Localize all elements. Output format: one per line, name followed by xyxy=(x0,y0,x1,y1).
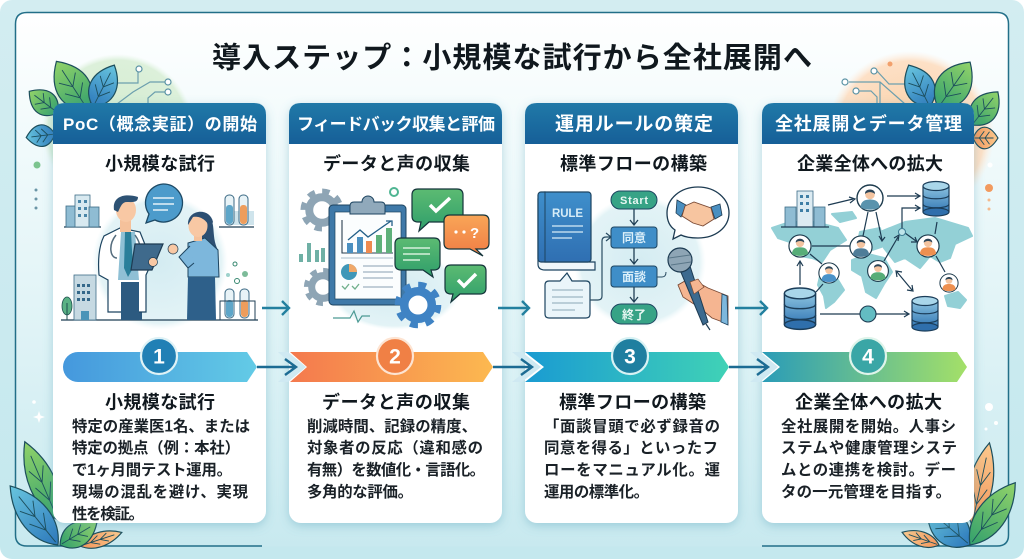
step 4 ribbon xyxy=(762,352,967,382)
illustration: rule book and flow: 同意 xyxy=(622,231,646,245)
panel: step 4 xyxy=(762,103,974,523)
step 1 subheading: 小規模な試行 xyxy=(105,154,215,174)
arrows: ribbon row xyxy=(257,352,778,382)
panel: step 1 xyxy=(53,103,266,523)
step 4 description: ステムや健康管理システ xyxy=(781,438,957,457)
illustration: rule book and flow xyxy=(538,187,729,330)
step 3 description: ローをマニュアル化。運 xyxy=(544,461,720,479)
step 1 ribbon xyxy=(63,352,257,382)
step 2 badge xyxy=(377,338,413,374)
step 3 description: 同意を得る」といったフ xyxy=(544,439,718,457)
step 2 badge: 2 xyxy=(389,346,401,368)
step 4 description: タの一元管理を目指す。 xyxy=(781,482,951,501)
step 1 description: 現場の混乱を避け、実現 xyxy=(72,483,249,501)
title: 導入ステップ：小規模な試行から全社展開へ xyxy=(212,42,812,74)
employee xyxy=(192,213,218,258)
step 2 description: 削減時間、記録の精度、 xyxy=(307,417,477,436)
step 2 description xyxy=(307,417,485,501)
step 1 badge xyxy=(141,338,177,374)
illustration: world network xyxy=(772,182,972,331)
step 4 header: 全社展開とデータ管理 xyxy=(775,113,962,134)
tubes bottom right xyxy=(233,262,237,266)
step 3 description xyxy=(544,417,720,501)
step 3 header xyxy=(525,103,738,144)
illustration: rule book and flow: RULE xyxy=(552,208,583,220)
step 1 description xyxy=(72,417,250,523)
doctor xyxy=(121,280,142,320)
step 4 subheading: 企業全体への拡大 xyxy=(797,154,943,174)
step 2 description: 有無）を数値化・言語化。 xyxy=(307,461,485,479)
step 1 description: 特定の拠点（例：本社） xyxy=(72,438,240,457)
step 4 header xyxy=(762,103,974,144)
step 1 header: PoC（概念実証）の開始 xyxy=(63,115,257,134)
step 3 badge xyxy=(612,338,648,374)
decoration: bottom leaves in front of cards and sparkles xyxy=(0,400,1024,554)
step 2 title: データと声の収集 xyxy=(322,392,470,412)
illustration: rule book and flow: 面談 xyxy=(622,269,646,284)
illustration: rule book and flow: Start xyxy=(620,195,648,207)
step 3 badge: 3 xyxy=(624,346,636,368)
step 4 description xyxy=(781,417,957,501)
step 1 description: 特定の産業医1名、または xyxy=(72,417,250,436)
step 4 badge: 4 xyxy=(862,346,874,368)
step 3 subheading: 標準フローの構築 xyxy=(560,153,707,174)
step 4 badge xyxy=(850,338,886,374)
step 3 description: 「面談冒頭で必ず録音の xyxy=(544,417,720,436)
step 4 description: ムとの連携を検討。デー xyxy=(781,460,956,479)
decoration: bottom leaves behind cards xyxy=(13,437,1001,558)
step 1 badge: 1 xyxy=(153,346,165,368)
panel: step 2 xyxy=(289,103,502,523)
step 2 description: 対象者の反応（違和感の xyxy=(307,438,483,457)
step 1 title: 小規模な試行 xyxy=(105,392,215,412)
step 1 description: で1ヶ月間テスト運用。 xyxy=(72,461,232,479)
step 2 header: フィードバック収集と評価 xyxy=(297,115,495,134)
step 3 ribbon xyxy=(525,352,729,382)
step 4 title: 企業全体への拡大 xyxy=(795,392,942,412)
illustration: rule book and flow: 終了 xyxy=(622,307,646,322)
decoration: top-left blob, circuit and leaves xyxy=(22,52,194,210)
illustration: clipboard and feedback: ? xyxy=(470,225,479,242)
step 3 title: 標準フローの構築 xyxy=(559,392,706,412)
step 2 description: 多角的な評価。 xyxy=(307,482,413,501)
step 2 subheading: データと声の収集 xyxy=(323,153,470,174)
step 3 header: 運用ルールの策定 xyxy=(555,113,713,135)
illustration: clipboard and feedback xyxy=(301,188,489,330)
step 2 ribbon xyxy=(290,352,493,382)
step 2 header xyxy=(289,103,502,144)
step 3 description: 運用の標準化。 xyxy=(544,482,649,501)
decoration: top-right blob, circuit and leaves xyxy=(826,51,1008,219)
arrows: upper row xyxy=(262,301,767,315)
step 4 description: 全社展開を開始。人事シ xyxy=(781,417,956,436)
illustration: doctor and employee xyxy=(61,184,258,330)
panel: step 3 xyxy=(525,103,738,523)
step 1 description: 性を検証。 xyxy=(72,504,144,523)
step 1 header xyxy=(53,103,266,144)
